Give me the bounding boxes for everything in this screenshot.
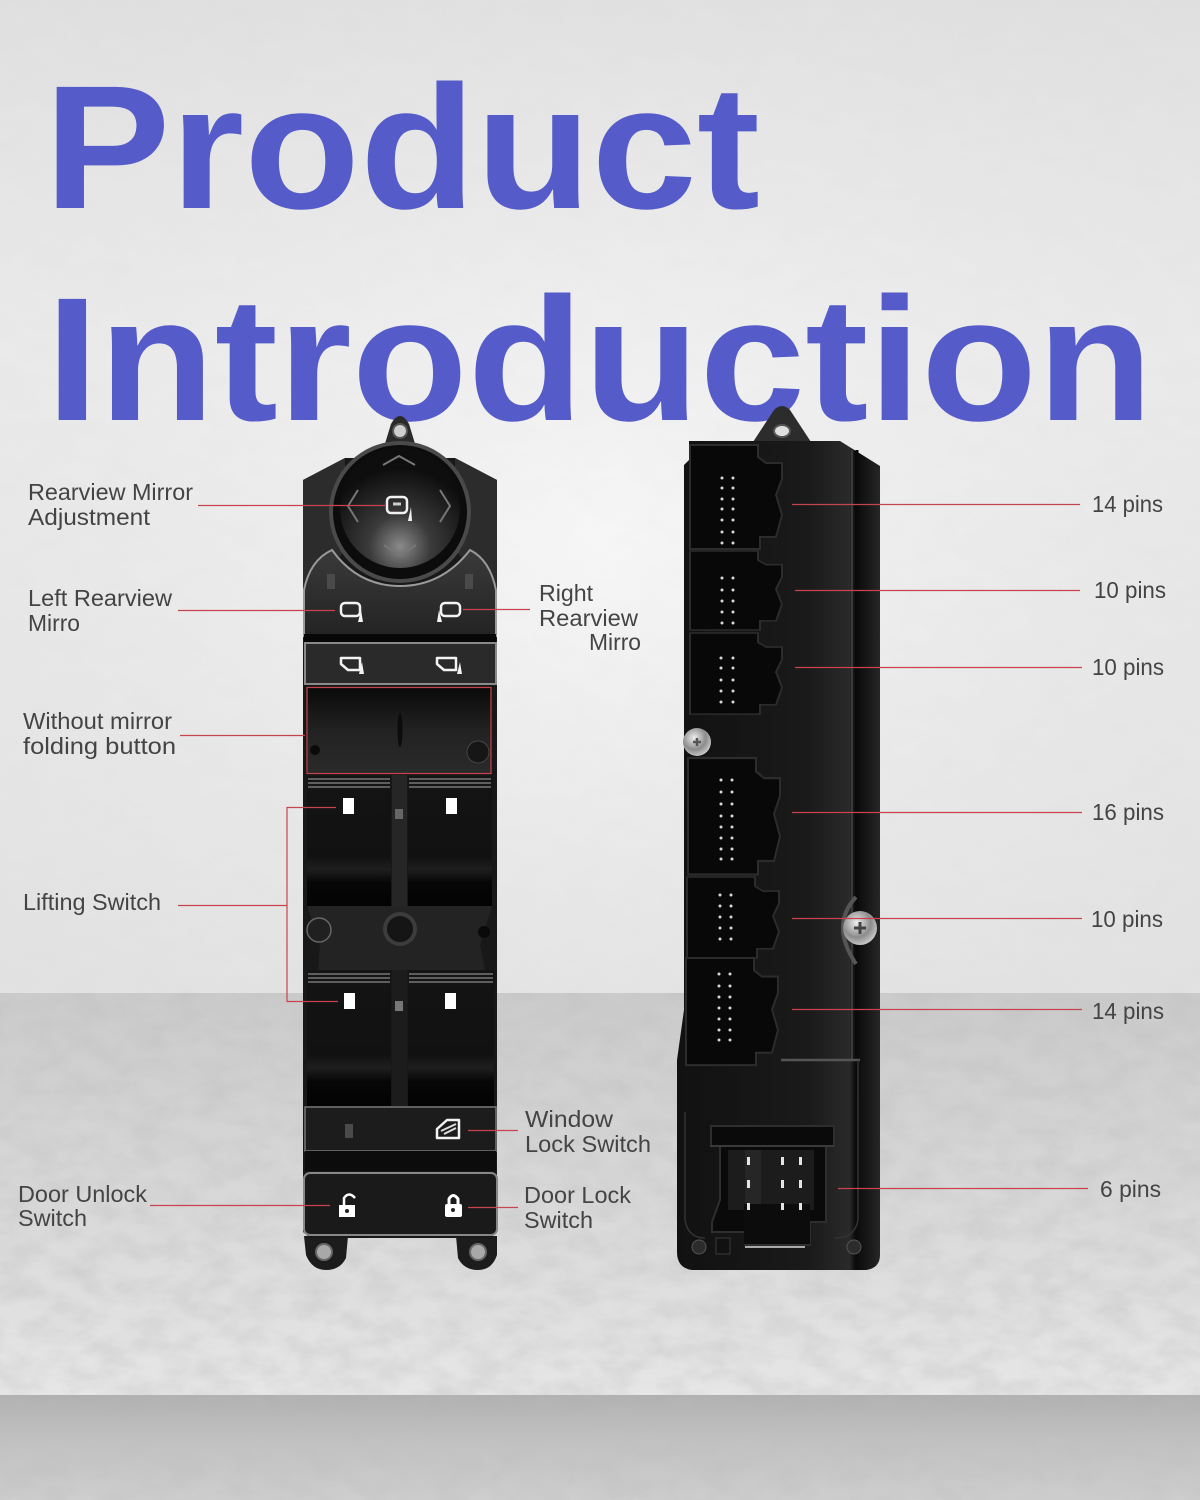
icon: fold right (437, 658, 462, 674)
mirror knob (329, 441, 471, 583)
label: 10 pins: 10 pins (1094, 577, 1166, 603)
rocker top right (408, 776, 492, 906)
icon: left mirror (341, 603, 363, 622)
label: door lock switch (468, 1182, 632, 1233)
screw upper (683, 728, 711, 756)
icon: fold left (341, 658, 364, 674)
label: 16 pins: 16 pins (1092, 799, 1164, 825)
door lock bar (304, 1173, 497, 1235)
icon: door unlock (339, 1194, 355, 1217)
label: right rearview mirror: Rearview (539, 605, 638, 631)
title: Product (44, 50, 760, 246)
label: door lock switch: Switch (524, 1207, 593, 1233)
label: window lock switch (468, 1106, 651, 1157)
label: lifting switch: Lifting Switch (23, 889, 161, 915)
label: 10 pins: 10 pins (1092, 654, 1164, 680)
screw lower (843, 897, 877, 964)
label: without mirror folding button: Without mirror (23, 708, 172, 734)
label: 6 pins: 6 pins (1100, 1176, 1161, 1202)
connector 10 pins upper (690, 551, 782, 630)
label: rearview mirror adjustment: Rearview Mirror (28, 479, 193, 505)
label: left rearview mirror: Left Rearview (28, 585, 172, 611)
centre plate (307, 906, 492, 970)
label: right rearview mirror: Right (539, 580, 594, 606)
housing (677, 406, 880, 1270)
rocker bottom right (408, 970, 494, 1106)
label: window lock switch: Lock Switch (525, 1131, 651, 1157)
label: rearview mirror adjustment (28, 479, 385, 530)
back of window switch (677, 406, 880, 1270)
label: door unlock switch: Door Unlock (18, 1181, 148, 1207)
title (44, 50, 1153, 458)
label: door unlock switch (18, 1181, 330, 1231)
icon: window lock (437, 1120, 459, 1138)
label: 14 pins: 14 pins (1092, 998, 1164, 1024)
connector 16 pins (688, 758, 780, 874)
label: left rearview mirror (28, 585, 335, 636)
label: without mirror folding button (23, 688, 491, 774)
connector 14 pins lower (686, 958, 778, 1065)
label: door lock switch: Door Lock (524, 1182, 632, 1208)
label: right rearview mirror: Mirro (589, 629, 641, 655)
label: lifting switch (23, 808, 338, 1002)
mirror select panel (304, 550, 496, 643)
label: window lock switch: Window (525, 1106, 613, 1132)
lifting switches (307, 775, 494, 1106)
connector 10 pins middle (690, 633, 782, 714)
mirror fold panel (305, 643, 496, 684)
label: 10 pins: 10 pins (1091, 906, 1163, 932)
icon: mirror adjust (387, 497, 412, 521)
connector 10 pins lower (687, 877, 779, 958)
blank panel without folding button (308, 688, 491, 773)
window lock bar (305, 1107, 496, 1171)
title: Introduction (46, 262, 1153, 458)
icon: right mirror (437, 603, 460, 622)
label: door unlock switch: Switch (18, 1205, 87, 1231)
label: 14 pins: 14 pins (1092, 491, 1163, 517)
label: rearview mirror adjustment: Adjustment (28, 504, 151, 530)
rocker bottom left (307, 970, 391, 1106)
label: without mirror folding button: folding button (23, 733, 176, 759)
connector 6 pins (692, 1126, 861, 1254)
label: left rearview mirror: Mirro (28, 610, 80, 636)
icon: door lock (445, 1196, 462, 1217)
switch body (303, 416, 497, 1270)
connector 14 pins (690, 445, 782, 549)
front of window switch (303, 416, 497, 1270)
bottom ledge (685, 1060, 860, 1238)
label: right rearview mirror (463, 580, 641, 655)
rocker top left (307, 776, 391, 906)
